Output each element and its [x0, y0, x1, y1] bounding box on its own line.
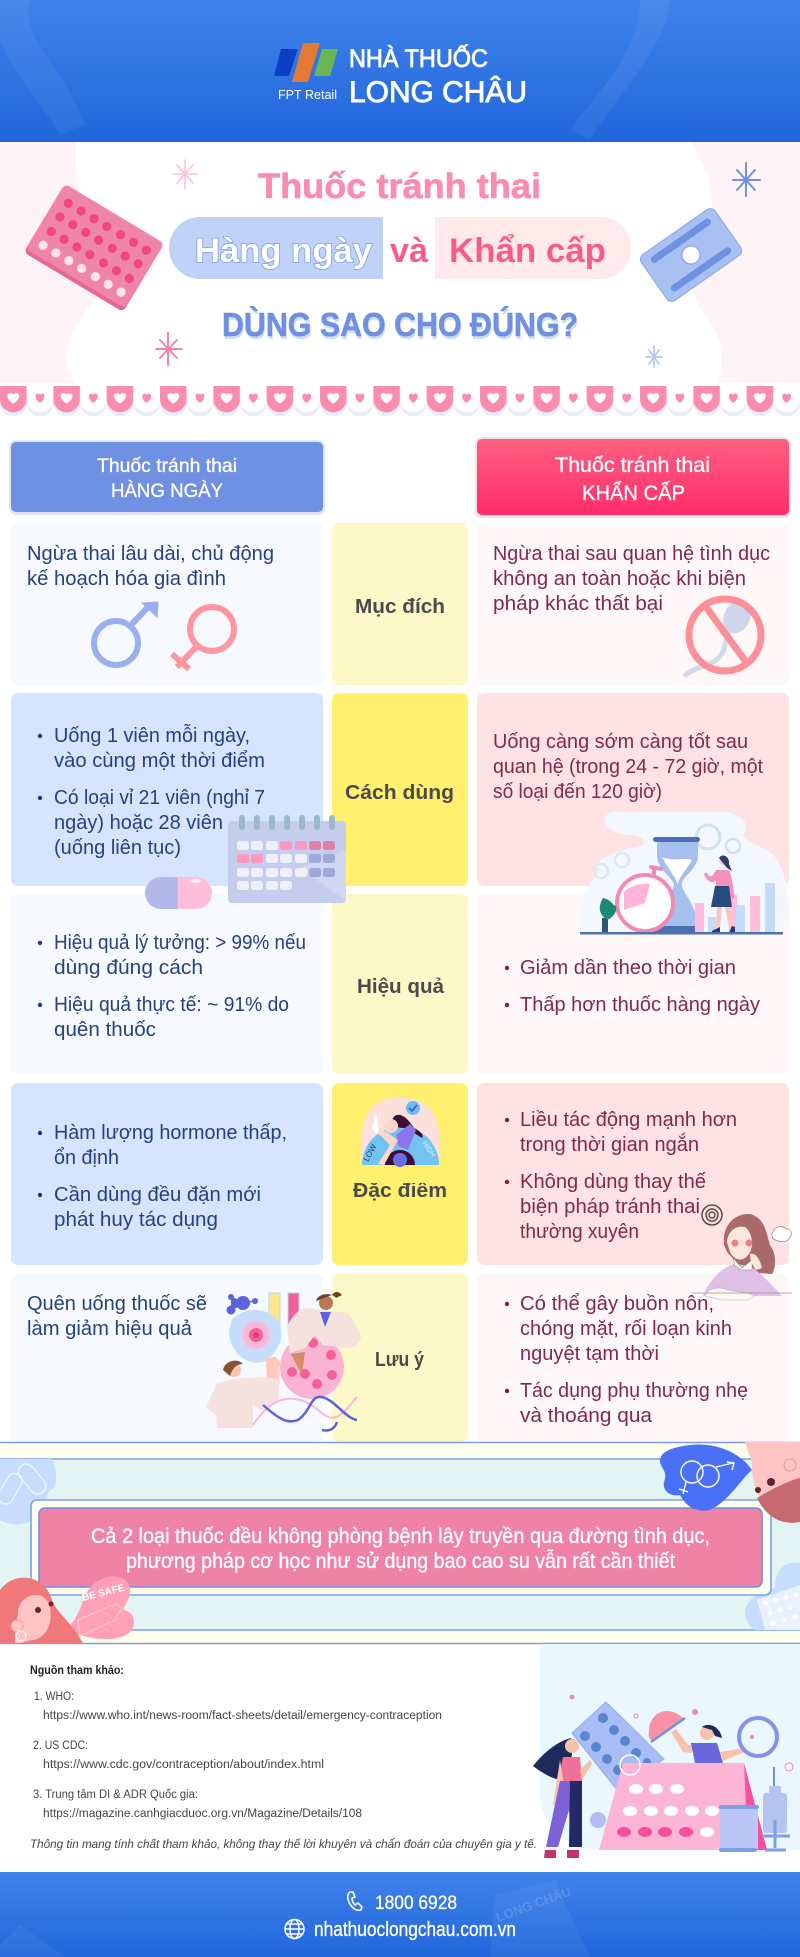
- icon: pink birth control blister: [24, 184, 164, 312]
- logo: FPT Retail: [274, 43, 338, 102]
- purpose: emergency cell: không an toàn hoặc khi biện: [493, 568, 746, 590]
- callout box: [31, 1500, 771, 1595]
- characteristics: daily cell: ổn định: [54, 1147, 119, 1169]
- characteristics: emergency cell: thường xuyên: [520, 1221, 639, 1243]
- characteristics: emergency cell: Liều tác động mạnh hơn: [520, 1109, 737, 1131]
- reference 1: https://www.who.int/news-room/fact-sheets/detail/emergency-contraception: [43, 1710, 442, 1722]
- characteristics: emergency cell: biện pháp tránh thai: [520, 1196, 700, 1218]
- phone number: 1800 6928: [375, 1893, 457, 1914]
- footer band: LONG CHÂU: [494, 1884, 573, 1925]
- effectiveness: daily cell: dùng đúng cách: [54, 957, 203, 979]
- illustration: hourglass and woman: [580, 812, 788, 934]
- usage: row label: [332, 693, 468, 886]
- usage: emergency cell: số loại đến 120 giờ): [493, 781, 662, 803]
- column header: emergency: KHẨN CẤP: [582, 482, 685, 505]
- callout box: phương pháp cơ học như sử dụng bao cao su vẫn rất cần thiết: [126, 1550, 675, 1573]
- purpose: daily cell: kế hoạch hóa gia đình: [27, 568, 226, 590]
- characteristics: row label: Đặc điểm: [353, 1180, 447, 1202]
- purpose: daily cell: [11, 523, 323, 685]
- decorative stars: [156, 160, 760, 367]
- reference 2: 2. US CDC:: [33, 1740, 88, 1752]
- logo: pharmacy name: LONG CHÂU: [349, 76, 527, 109]
- logo: pharmacy name: NHÀ THUỐC: [349, 43, 488, 73]
- icon: blue emergency pill card: [638, 206, 744, 304]
- usage: daily cell: (uống liên tục): [54, 837, 181, 859]
- reference 1: 1. WHO:: [34, 1691, 74, 1703]
- icon: no sperm sign: [684, 596, 761, 676]
- illustration: characteristics gauge: LOW: [362, 1142, 379, 1163]
- row 2: how to use: [11, 693, 789, 886]
- notes: daily cell: [11, 1274, 323, 1442]
- purpose: emergency cell: pháp khác thất bại: [493, 593, 663, 615]
- illustration: girl with be safe bubble: BE SAFE: [81, 1583, 126, 1604]
- reference 3: 3. Trung tâm DI & ADR Quốc gia:: [33, 1789, 198, 1801]
- characteristics: emergency cell: Không dùng thay thế: [520, 1171, 706, 1193]
- illustration: girl with be safe bubble: [0, 1576, 134, 1643]
- row 4: characteristics: [11, 1083, 789, 1265]
- characteristics: daily cell: Cần dùng đều đặn mới: [54, 1184, 261, 1206]
- characteristics: row label: [332, 1083, 468, 1265]
- notes: emergency cell: và thoáng qua: [520, 1405, 653, 1427]
- notice banner background: [0, 1442, 800, 1644]
- row 5: notes: [11, 1274, 789, 1442]
- usage: row label: Cách dùng: [345, 782, 454, 804]
- logo: pharmacy name: [349, 43, 527, 109]
- effectiveness: emergency cell: Giảm dần theo thời gian: [520, 957, 736, 979]
- column header: emergency: [475, 437, 791, 518]
- disclaimer: Thông tin mang tính chất tham khảo, không thay thế lời khuyên và chẩn đoán của chuyên gia y tế.: [30, 1839, 537, 1851]
- icon: globe: [285, 1920, 304, 1938]
- effectiveness: daily cell: Hiệu quả thực tế: ~ 91% do: [54, 994, 289, 1016]
- reference 2: https://www.cdc.gov/contraception/about/index.html: [43, 1759, 324, 1771]
- reference 3: https://magazine.canhgiacduoc.org.vn/Magazine/Details/108: [43, 1808, 362, 1820]
- usage: daily cell: ngày) hoặc 28 viên: [54, 812, 223, 834]
- hero panel background: [0, 142, 800, 383]
- icon: calendar: [228, 815, 346, 903]
- characteristics: daily cell: Hàm lượng hormone thấp,: [54, 1122, 287, 1144]
- effectiveness: daily cell: Hiệu quả lý tưởng: > 99% nếu: [54, 932, 306, 954]
- illustration: scientists, cells and DNA: [206, 1292, 361, 1431]
- purpose: emergency cell: Ngừa thai sau quan hệ tình dục: [493, 543, 770, 565]
- icon: capsule: [145, 877, 212, 909]
- column header: daily: HÀNG NGÀY: [111, 481, 223, 502]
- reference 3: [33, 1789, 362, 1820]
- row 3: effectiveness: [11, 894, 789, 1074]
- notes: row label: [332, 1274, 468, 1442]
- callout box: Cả 2 loại thuốc đều không phòng bệnh lây truyền qua đường tình dục,: [91, 1525, 710, 1548]
- illustration: contraception methods: [533, 1694, 793, 1858]
- effectiveness: emergency cell: [477, 894, 789, 1074]
- row 1: purpose: [11, 523, 789, 685]
- column header: emergency: Thuốc tránh thai: [555, 454, 710, 477]
- title: line 3: DÙNG SAO CHO ĐÚNG?: [222, 306, 578, 343]
- illustration: characteristics gauge: HIGH: [420, 1140, 436, 1158]
- icon: phone: [348, 1892, 362, 1910]
- notes: row label: Lưu ý: [375, 1349, 425, 1371]
- notes: emergency cell: nguyệt tạm thời: [520, 1343, 659, 1365]
- panel: references illustration background: [540, 1644, 800, 1850]
- title: line 1: Thuốc tránh thai: [258, 167, 541, 206]
- notes: daily cell: làm giảm hiệu quả: [27, 1318, 193, 1340]
- reference 1: [34, 1691, 442, 1722]
- illustration: head with blue gender bubble: [660, 1442, 800, 1523]
- purpose: row label: [332, 523, 468, 685]
- references heading: Nguồn tham khảo:: [30, 1663, 124, 1677]
- characteristics: daily cell: phát huy tác dụng: [54, 1209, 218, 1231]
- notes: emergency cell: chóng mặt, rối loạn kinh: [520, 1318, 732, 1340]
- effectiveness: daily cell: [11, 894, 323, 1074]
- characteristics: emergency cell: [477, 1083, 789, 1265]
- usage: daily cell: Uống 1 viên mỗi ngày,: [54, 724, 250, 747]
- illustration: characteristics gauge: [360, 1097, 442, 1183]
- logo: FPT Retail: FPT Retail: [278, 87, 337, 102]
- characteristics: emergency cell: trong thời gian ngắn: [520, 1133, 699, 1156]
- scalloped heart border: [0, 383, 800, 420]
- purpose: daily cell: Ngừa thai lâu dài, chủ động: [27, 543, 274, 565]
- usage: emergency cell: [477, 693, 789, 886]
- notes: emergency cell: [477, 1274, 789, 1442]
- references: [30, 1663, 537, 1851]
- effectiveness: row label: [332, 894, 468, 1074]
- usage: daily cell: vào cùng một thời điểm: [54, 750, 265, 772]
- decoration: top-left pills blob: [0, 1459, 56, 1524]
- footer band: [0, 1872, 800, 1957]
- decoration: bottom-right blister blob: [745, 1562, 800, 1630]
- effectiveness: row label: Hiệu quả: [357, 976, 445, 998]
- website: nhathuoclongchau.com.vn: [314, 1919, 516, 1941]
- purpose: emergency cell: [477, 523, 789, 685]
- illustration: stressed woman: [692, 1205, 792, 1300]
- icon: female symbol: [172, 607, 234, 669]
- header band: [0, 0, 800, 142]
- usage: emergency cell: quan hệ (trong 24 - 72 giờ, một: [493, 756, 763, 778]
- reference 2: [33, 1740, 324, 1771]
- usage: daily cell: [11, 693, 323, 886]
- usage: emergency cell: Uống càng sớm càng tốt sau: [493, 731, 748, 753]
- effectiveness: daily cell: quên thuốc: [54, 1019, 156, 1041]
- purpose: row label: Mục đích: [355, 596, 445, 618]
- title: highlighted pills line: Hàng ngày: [195, 232, 372, 270]
- notes: emergency cell: Có thể gây buồn nôn,: [520, 1293, 714, 1315]
- icon: male symbol: [94, 602, 158, 665]
- usage: daily cell: Có loại vỉ 21 viên (nghỉ 7: [54, 787, 265, 809]
- effectiveness: emergency cell: Thấp hơn thuốc hàng ngày: [520, 994, 760, 1016]
- title: highlighted pills line: và: [390, 232, 428, 270]
- column header: daily: Thuốc tránh thai: [97, 456, 237, 477]
- column header: daily: [9, 440, 325, 515]
- title: line 3: DÙNG SAO CHO ĐÚNG?: [223, 309, 579, 346]
- characteristics: daily cell: [11, 1083, 323, 1265]
- notes: daily cell: Quên uống thuốc sẽ: [27, 1293, 207, 1315]
- notes: emergency cell: Tác dụng phụ thường nhẹ: [520, 1380, 748, 1402]
- title: highlighted pills line: [169, 217, 631, 279]
- title: highlighted pills line: Khẩn cấp: [449, 232, 606, 270]
